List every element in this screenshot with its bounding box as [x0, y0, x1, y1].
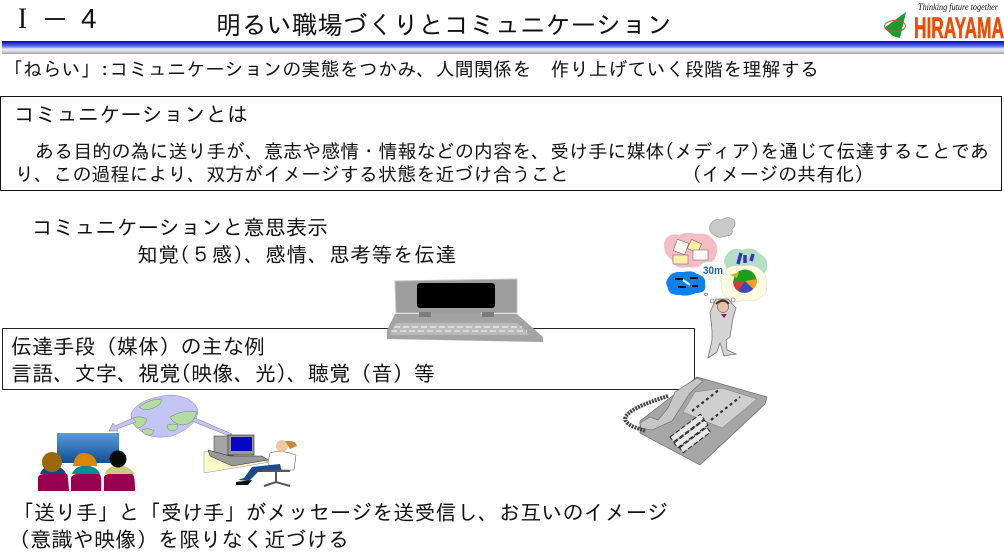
section number: I: [18, 2, 27, 35]
white 30 min cloud: [699, 261, 726, 278]
arrow to screen: [109, 418, 136, 431]
diagram: audience, globe and sender: [38, 395, 297, 491]
grey cloud: [710, 218, 735, 237]
definition text: (イメージの共有化): [692, 165, 864, 184]
definition text: [15, 141, 989, 184]
blue screen: [57, 433, 119, 463]
thought bubbles: [705, 293, 735, 303]
definition text: り、この過程により、双方がイメージする状態を近づけ合うこと: [15, 164, 569, 184]
closing message: [9, 502, 668, 550]
pink cloud with notes: [664, 233, 717, 268]
audience: [38, 450, 135, 491]
sub text: what is conveyed: 知覚(５感)、感情、思考等を伝達: [137, 244, 456, 265]
closing message: 「送り手」と「受け手」がメッセージを送受信し、お互いのイメージ: [13, 502, 668, 523]
definition text: ある目的の為に送り手が、意志や感情・情報などの内容を、受け手に媒体(メディア)を通じて伝達することであ: [35, 141, 989, 161]
section number: [18, 2, 97, 35]
blue cloud with chart: [666, 271, 705, 296]
arrow to computer: [192, 418, 232, 436]
function buttons: [692, 389, 740, 420]
logo: HIRAYAMA: [884, 2, 1004, 45]
section number: 4: [81, 3, 97, 34]
cream cloud with pie chart: [720, 265, 767, 302]
button panel: [683, 388, 757, 428]
globe: [130, 395, 198, 437]
person: [708, 299, 736, 358]
media list: 言語、文字、視覚(映像、光)、聴覚（音）等: [11, 362, 435, 384]
handset: [640, 378, 703, 430]
icon: laptop: [387, 279, 543, 342]
media heading: 伝達手段（媒体）の主な例: [11, 336, 265, 357]
computer user: [204, 435, 297, 486]
title: 明るい職場づくりとコミュニケーション: [216, 12, 672, 38]
white 30 min cloud: 30m: [703, 265, 723, 277]
panel: media examples: [2, 328, 694, 390]
panel: definition of communication: [0, 96, 1002, 190]
definition heading: コミュニケーションとは: [14, 104, 248, 125]
coiled cord: [625, 396, 668, 431]
header band: [2, 41, 1004, 54]
keypad: [670, 414, 710, 453]
icon: desk telephone: [625, 377, 767, 465]
green cloud with bars: [724, 249, 767, 274]
icon: thinking person with thought clouds: [664, 218, 767, 358]
aim statement: 「ねらい」:コミュニケーションの実態をつかみ、人間関係を 作り上げていく段階を理解する: [4, 59, 819, 79]
subheading: communication and expression: コミュニケーションと意思表示: [32, 217, 328, 238]
closing message: （意識や映像）を限りなく近づける: [9, 529, 349, 550]
